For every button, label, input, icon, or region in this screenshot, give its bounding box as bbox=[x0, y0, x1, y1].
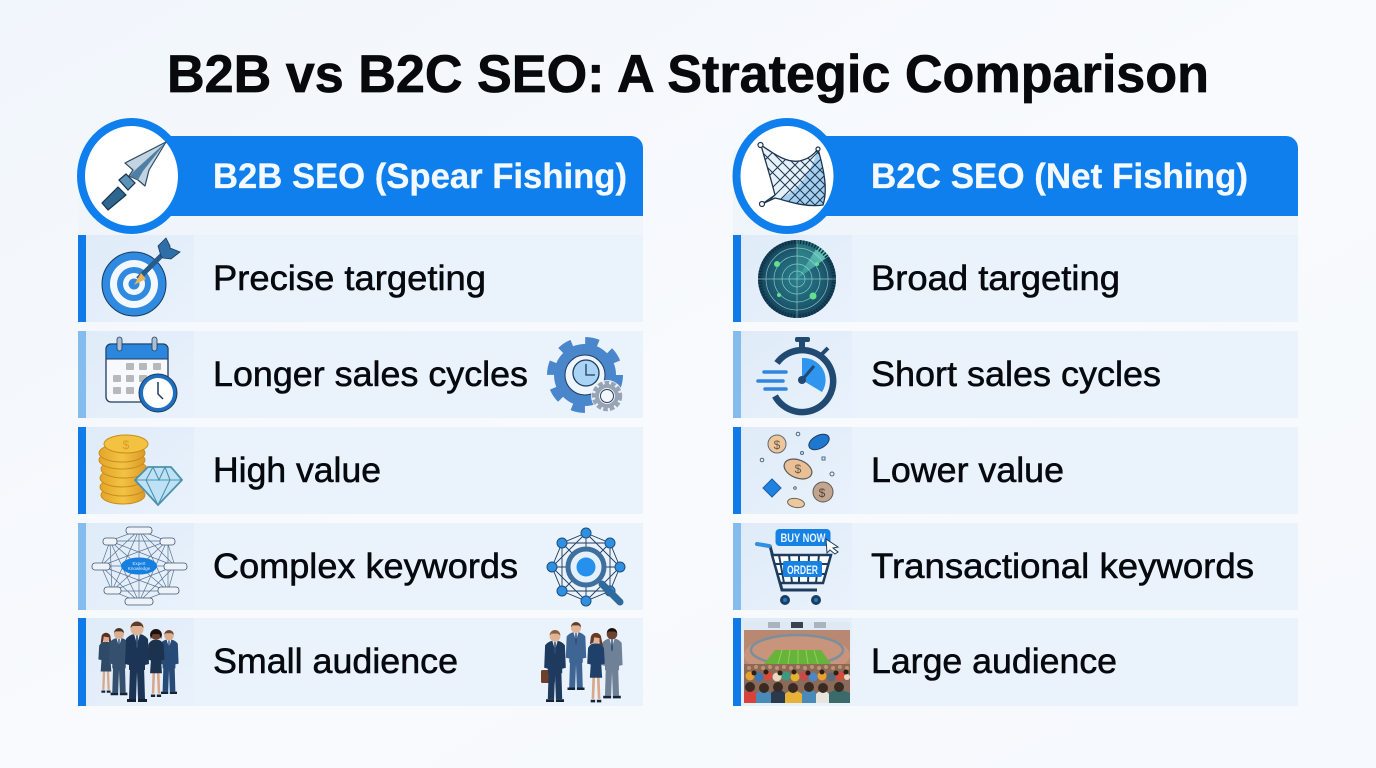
icon: small business team bbox=[98, 622, 179, 702]
row: High value bbox=[78, 427, 643, 514]
row: Small audience bbox=[78, 618, 643, 706]
row: Complex keywords bbox=[78, 523, 643, 610]
icon: fishing net bbox=[732, 118, 834, 234]
label: Longer sales cycles bbox=[213, 355, 528, 394]
label: Transactional keywords bbox=[871, 547, 1254, 586]
panel: B2B SEO column bbox=[78, 122, 643, 706]
icon: radar bbox=[758, 240, 836, 318]
icon: shopping cart with buttons: BUY NOW bbox=[780, 531, 826, 545]
icon: scattered coins: $ bbox=[774, 438, 781, 452]
icon: calendar with clock bbox=[106, 337, 177, 412]
icon: stadium crowd bbox=[744, 622, 850, 703]
icon: shopping cart with buttons: ORDER bbox=[787, 563, 818, 577]
icon: stopwatch bbox=[758, 337, 833, 412]
icon: keyword web: Expert bbox=[132, 561, 146, 566]
icon: gold coins and diamond bbox=[99, 435, 182, 505]
row: Broad targeting bbox=[733, 235, 1298, 322]
label: High value bbox=[213, 451, 381, 490]
row: Lower value bbox=[733, 427, 1298, 514]
icon: target with dart bbox=[102, 238, 180, 316]
panel: B2C SEO column bbox=[733, 122, 1298, 706]
label: Short sales cycles bbox=[871, 355, 1161, 394]
icon: gold coins and diamond: $ bbox=[123, 438, 130, 452]
label: Broad targeting bbox=[871, 259, 1120, 298]
title: B2B vs B2C SEO: A Strategic Comparison bbox=[167, 45, 1209, 104]
icon: team shaking hands bbox=[541, 622, 623, 702]
header: B2C SEO bbox=[775, 136, 1298, 216]
label: Precise targeting bbox=[213, 259, 486, 298]
icon: scattered coins bbox=[760, 431, 834, 509]
icon: scattered coins: $ bbox=[795, 462, 802, 476]
label: Lower value bbox=[871, 451, 1064, 490]
label: Large audience bbox=[871, 642, 1117, 681]
icon: scattered coins: $ bbox=[819, 486, 826, 500]
icon: network magnifier bbox=[547, 528, 625, 606]
row: Longer sales cycles bbox=[78, 331, 643, 418]
header: B2C SEO: B2C SEO (Net Fishing) bbox=[871, 157, 1248, 196]
row: Short sales cycles bbox=[733, 331, 1298, 418]
row: Transactional keywords bbox=[733, 523, 1298, 610]
icon: gear with clock bbox=[552, 342, 623, 412]
icon: shopping cart with buttons bbox=[757, 529, 838, 604]
label: Small audience bbox=[213, 642, 458, 681]
label: Complex keywords bbox=[213, 547, 518, 586]
header: B2B SEO bbox=[120, 136, 643, 216]
row: Precise targeting bbox=[78, 235, 643, 322]
row: Large audience bbox=[733, 618, 1298, 706]
icon: keyword web: Knowledge bbox=[128, 566, 151, 571]
icon: keyword web bbox=[92, 527, 187, 605]
icon: spear bbox=[81, 122, 182, 230]
header: B2B SEO: B2B SEO (Spear Fishing) bbox=[213, 157, 627, 196]
